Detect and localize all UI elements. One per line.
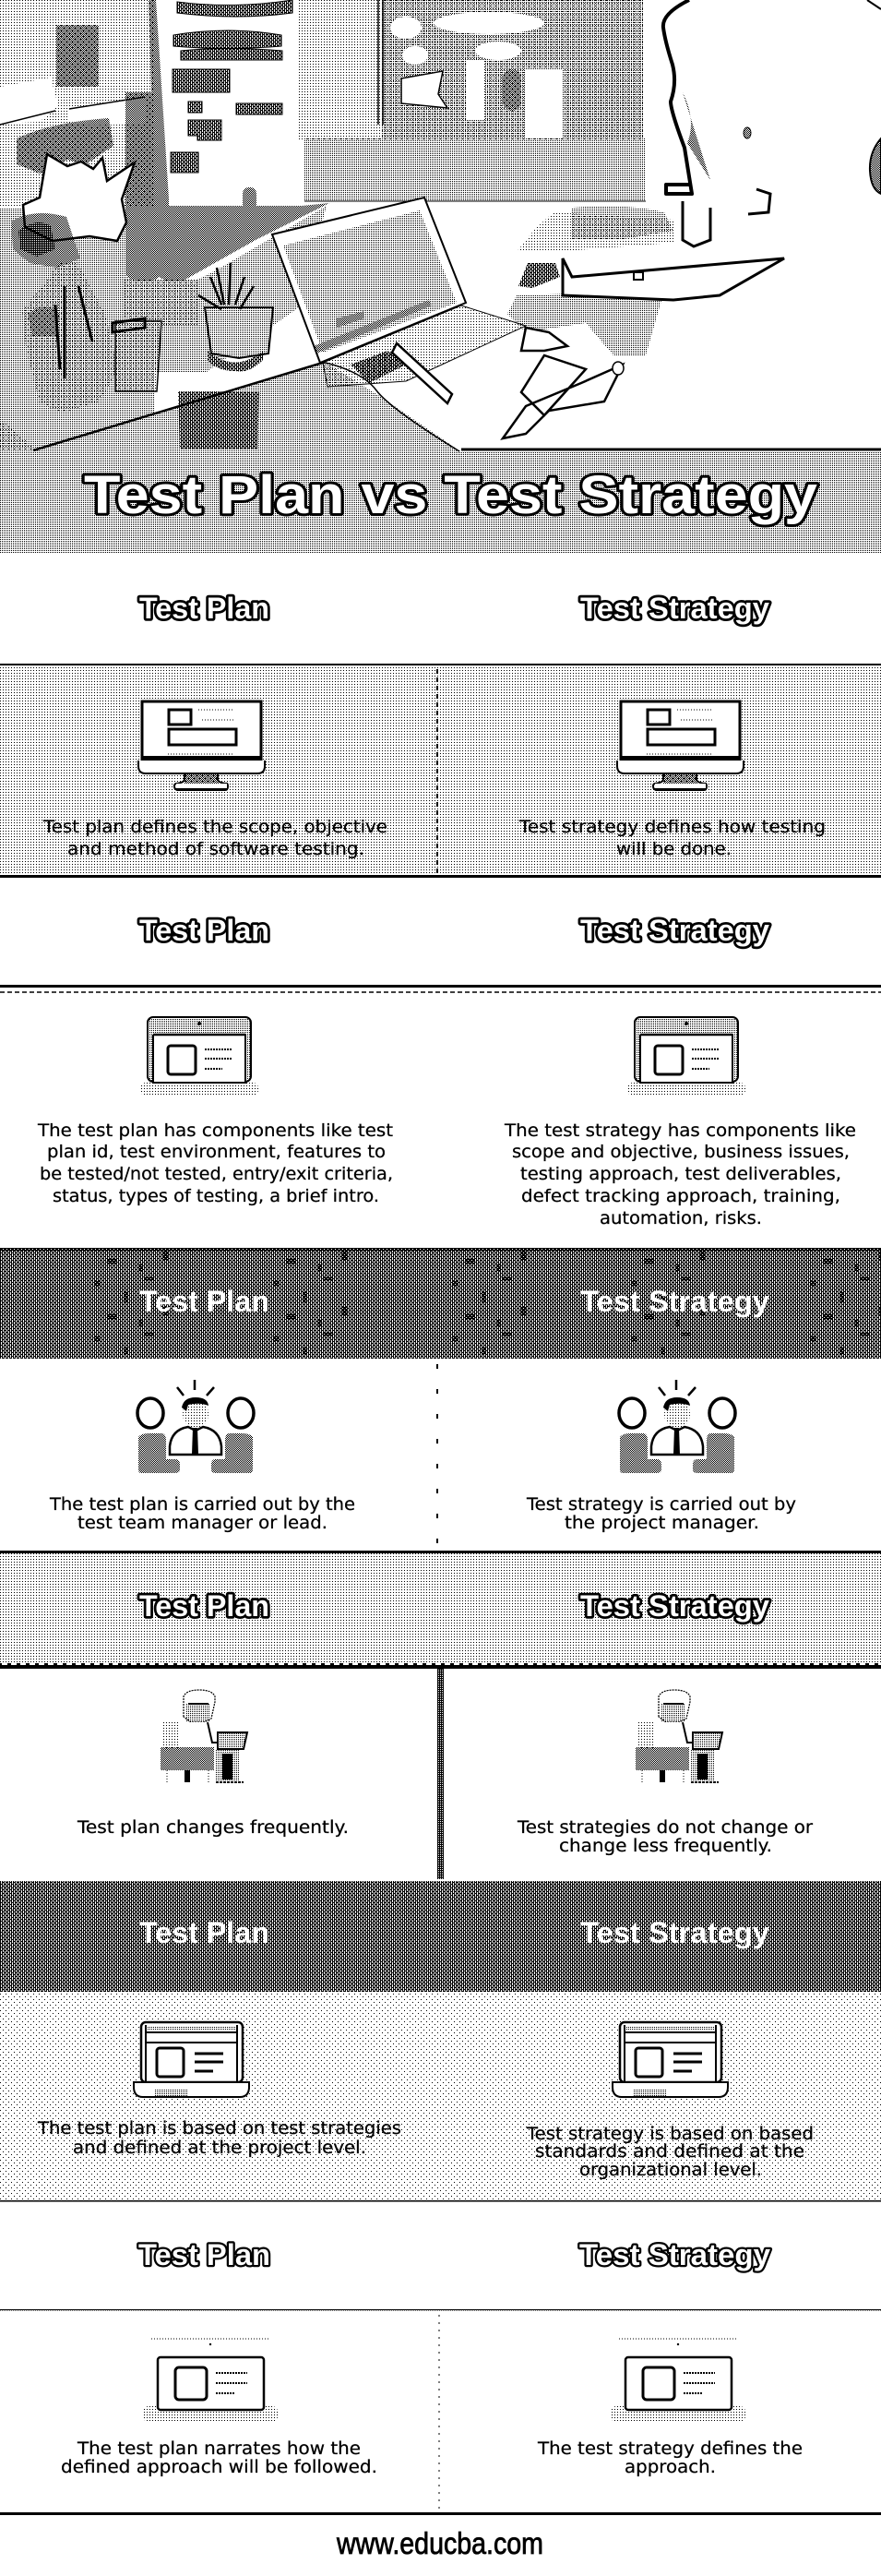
icon: seated person left (161, 1690, 247, 1782)
comparison header 4 (0, 1553, 881, 1669)
icon: browser left (140, 1017, 258, 1096)
heading: test strategy: Test Strategy (580, 1916, 769, 1949)
heading: test strategy: Test Strategy (580, 1285, 769, 1318)
heading: test plan: Test Plan (139, 592, 269, 625)
text: test strategy changes: Test strategies do not change or (517, 1818, 813, 1838)
text: test strategy owner: Test strategy is carried out by (526, 1495, 796, 1515)
comparison header 3 dark (0, 1248, 881, 1359)
text: test strategy components: testing approach, test deliverables, (520, 1164, 841, 1184)
text: test strategy basis: organizational level. (579, 2161, 762, 2180)
text: test strategy scope: Test strategy defines how testing (518, 817, 826, 837)
text: test plan owner: The test plan is carried out by the (49, 1495, 355, 1515)
photo: desk with laptop and plants (0, 0, 881, 451)
heading: test plan: Test Plan (139, 914, 269, 947)
text: test strategy changes: change less frequently. (559, 1837, 772, 1856)
text: test strategy components: defect tracking approach, training, (521, 1186, 840, 1206)
text: test strategy approach: The test strategy defines the (537, 2439, 803, 2459)
text: test plan changes: Test plan changes frequently. (77, 1818, 349, 1838)
text: test plan approach: The test plan narrates how the (77, 2439, 361, 2459)
title band (0, 451, 881, 554)
comparison header 5 dark (0, 1881, 881, 1992)
comparison header 2 (0, 878, 881, 986)
panel: row 2 components (0, 985, 881, 1228)
text: test plan approach: defined approach will be followed. (61, 2458, 377, 2477)
footer url: www.educba.com (336, 2526, 543, 2560)
text: test strategy basis: Test strategy is based on based (526, 2125, 814, 2144)
comparison header 1 (0, 554, 881, 665)
text: test plan owner: test team manager or lead. (77, 1514, 327, 1533)
panel: row 6 approach (0, 2315, 881, 2515)
text: test strategy components: The test strategy has components like (504, 1120, 856, 1141)
heading: test strategy: Test Strategy (580, 914, 769, 947)
title: Test Plan vs Test Strategy (84, 465, 817, 525)
icon: people left (137, 1380, 254, 1473)
icon: tablet right (611, 2339, 745, 2422)
heading: test strategy: Test Strategy (579, 2238, 770, 2271)
text: test plan components: The test plan has components like test (37, 1120, 393, 1141)
heading: test strategy: Test Strategy (580, 592, 769, 625)
icon: browser right (627, 1017, 745, 1096)
heading: test plan: Test Plan (138, 2238, 270, 2271)
text: test strategy owner: the project manager. (565, 1514, 759, 1533)
heading: test plan: Test Plan (139, 1916, 269, 1949)
icon: seated person right (636, 1690, 722, 1782)
icon: monitor right (617, 701, 744, 790)
text: test plan components: plan id, test environment, features to (47, 1142, 386, 1162)
panel: row 5 defined level (0, 1992, 881, 2202)
text: test strategy scope: will be done. (616, 839, 732, 859)
heading: test strategy: Test Strategy (580, 1589, 769, 1623)
panel: row 4 change frequency (0, 1669, 881, 1881)
icon: laptop right (613, 2022, 728, 2097)
panel: row 1 scope (0, 664, 881, 878)
text: test plan basis: The test plan is based on test strategies (37, 2119, 401, 2139)
icon: monitor left (138, 701, 265, 790)
icon: people right (619, 1380, 735, 1473)
text: test strategy components: automation, risks. (600, 1208, 762, 1228)
heading: test plan: Test Plan (139, 1285, 269, 1318)
panel: row 3 carried out by (0, 1359, 881, 1553)
text: test strategy basis: standards and defined at the (535, 2142, 804, 2162)
text: test plan components: status, types of testing, a brief intro. (53, 1186, 379, 1206)
comparison header 6 (0, 2202, 881, 2311)
text: test strategy approach: approach. (625, 2458, 716, 2477)
text: test plan components: be tested/not tested, entry/exit criteria, (40, 1164, 393, 1184)
heading: test plan: Test Plan (139, 1589, 269, 1623)
icon: laptop left (134, 2022, 249, 2097)
text: test plan scope: Test plan defines the scope, objective (42, 817, 387, 837)
text: test strategy components: scope and objective, business issues, (512, 1142, 850, 1162)
icon: tablet left (143, 2339, 278, 2422)
text: test plan scope: and method of software testing. (67, 839, 364, 859)
text: test plan basis: and defined at the project level. (73, 2139, 366, 2158)
